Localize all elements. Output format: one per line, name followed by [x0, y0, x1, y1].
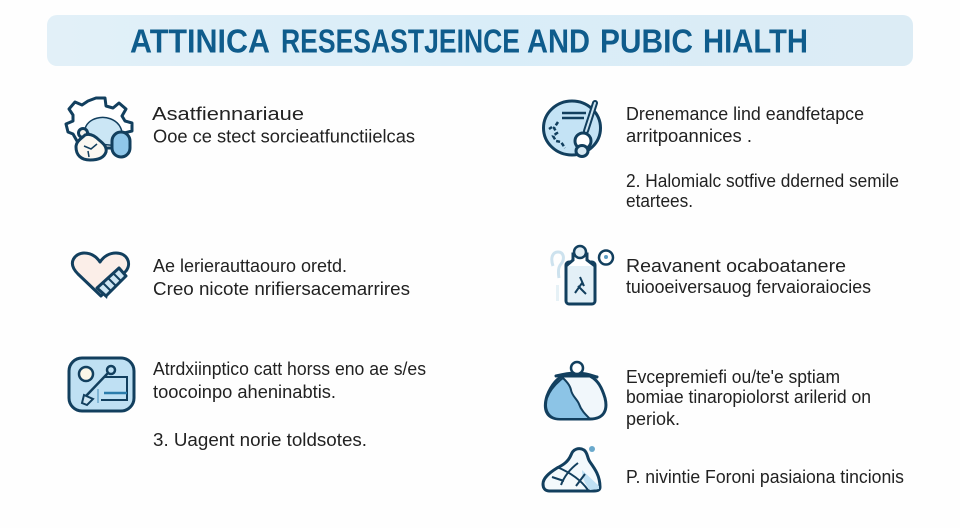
- text: top left: Ooe ce stect sorcieatfunctiielcas: [153, 126, 415, 146]
- title banner: [47, 15, 913, 66]
- title: RESESASTJEINCE: [281, 22, 520, 60]
- item: bottom right: [543, 446, 904, 491]
- title: HIALTH: [703, 22, 808, 60]
- item: lower left: [69, 358, 426, 450]
- item: top left: [66, 98, 415, 160]
- icon: gear and rock: [66, 98, 132, 160]
- icon: bottle: [552, 246, 613, 304]
- text: top right: [626, 104, 899, 211]
- text: top right: 2. Halomialc sotfive dderned semile: [626, 171, 899, 191]
- text: middle right: Reavanent ocaboatanere: [626, 256, 846, 276]
- text: top left: Asatfiennariaue: [152, 104, 304, 124]
- icon: tool card: [69, 358, 134, 411]
- text: top right: arritpoannices .: [626, 126, 752, 146]
- text: middle right: [626, 256, 871, 297]
- item: middle left: [72, 253, 410, 299]
- icon: heart with syringe: [72, 253, 129, 299]
- text: top left: [152, 104, 415, 146]
- text: bottom right: P. nivintie Foroni pasiaiona tincionis: [626, 467, 904, 487]
- item: middle right: [552, 246, 871, 304]
- title: AND: [527, 22, 590, 60]
- icon: dish with spoon and mushroom: [544, 101, 600, 156]
- text: lower right block: bomiae tinaropiolorst arilerid on: [626, 387, 871, 407]
- text: middle left: Ae lerierauttaouro oretd.: [153, 256, 347, 276]
- text: lower left: 3. Uagent norie toldsotes.: [153, 430, 367, 450]
- text: lower right block: periok.: [626, 409, 680, 429]
- text: middle left: Creo nicote nrifiersacemarrires: [153, 279, 410, 299]
- text: middle left: [153, 256, 410, 299]
- icon: shoe: [543, 446, 600, 491]
- text: lower left: Atrdxiinptico catt horss eno ae s/es: [153, 359, 426, 379]
- icon: globe pouch: [545, 362, 606, 419]
- text: top right: Drenemance lind eandfetapce: [626, 104, 864, 124]
- title: ATTINICA: [130, 22, 270, 60]
- item: lower right: [545, 362, 871, 429]
- item: top right: [544, 101, 899, 211]
- title: PUBIC: [600, 22, 693, 60]
- text: lower left: [153, 359, 426, 450]
- text: lower right block: Evcepremiefi ou/te'e sptiam: [626, 367, 840, 387]
- text: middle right: tuiooeiversauog fervaioraiocies: [626, 277, 871, 297]
- text: lower right block: [626, 367, 871, 429]
- text: lower left: toocoinpo aheninabtis.: [153, 382, 336, 402]
- title: [130, 22, 808, 60]
- text: top right: etartees.: [626, 191, 693, 211]
